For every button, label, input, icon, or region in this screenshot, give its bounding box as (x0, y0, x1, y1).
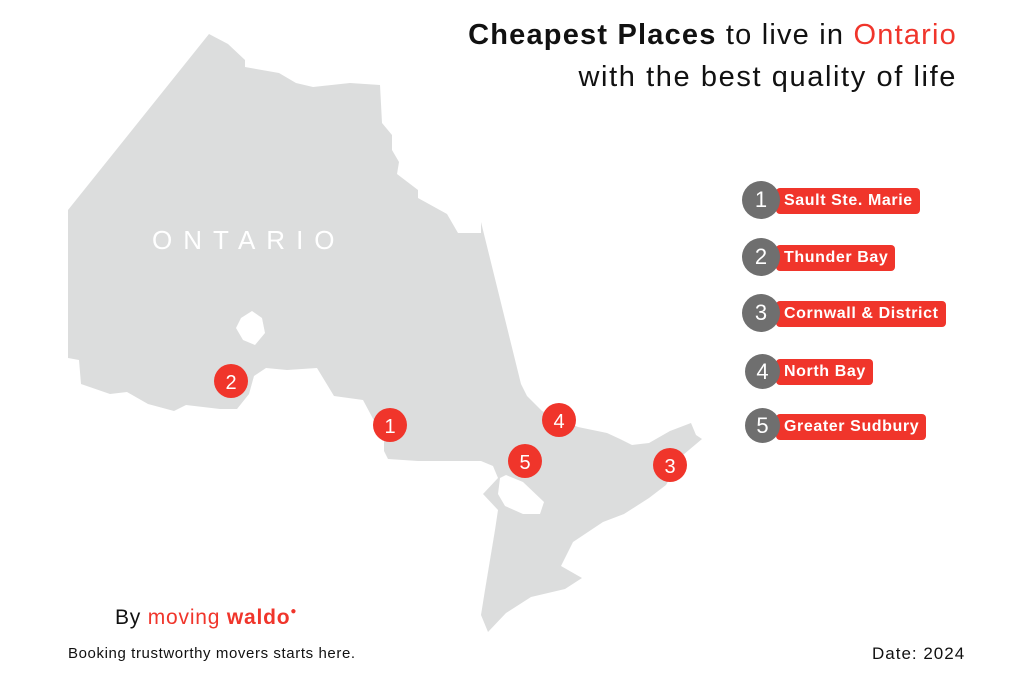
marker 2: 2 (225, 372, 237, 394)
text: Thunder Bay (784, 249, 888, 266)
legend item 1 (742, 181, 920, 219)
logo: By moving waldo● (115, 606, 297, 629)
marker 4 (542, 403, 576, 437)
text: Cornwall & District (784, 305, 939, 322)
marker 3 (653, 448, 687, 482)
marker 5: 5 (519, 452, 531, 474)
text: 5 (756, 413, 769, 438)
text: Sault Ste. Marie (784, 192, 913, 209)
text: 1 (755, 187, 767, 212)
text: North Bay (784, 363, 866, 380)
date: Date: 2024 (872, 644, 965, 663)
text: 3 (755, 300, 767, 325)
title (468, 19, 957, 93)
marker 2 (214, 364, 248, 398)
marker 1 (373, 408, 407, 442)
text: 2 (755, 244, 767, 269)
text: 4 (756, 359, 769, 384)
legend item 3 (742, 294, 946, 332)
marker 5 (508, 444, 542, 478)
marker 3: 3 (664, 456, 676, 478)
tagline: Booking trustworthy movers starts here. (68, 645, 356, 662)
text: Greater Sudbury (784, 418, 919, 435)
marker 4: 4 (553, 411, 565, 433)
map label: ONTARIO (152, 225, 346, 255)
marker 1: 1 (384, 416, 396, 438)
legend item 5 (745, 408, 926, 443)
legend item 2 (742, 238, 895, 276)
legend item 4 (745, 354, 873, 389)
title: with the best quality of life (579, 61, 957, 93)
title: Cheapest Places to live in Ontario (468, 19, 957, 51)
